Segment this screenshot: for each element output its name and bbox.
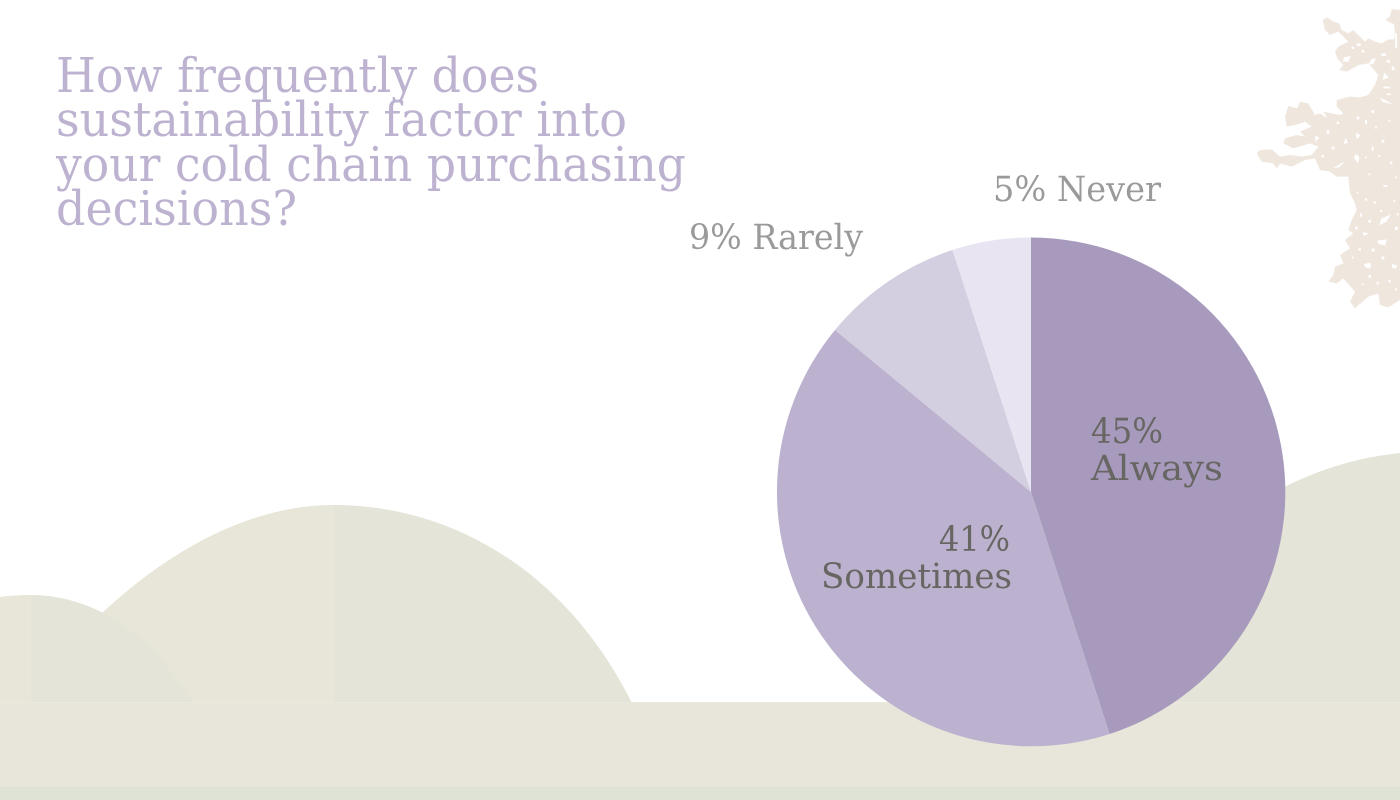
pie chart [777, 238, 1285, 746]
slice: Rarely 9% [835, 250, 1031, 492]
label: 45% Always: 45% [1091, 412, 1163, 452]
title [55, 48, 686, 237]
slice: Never 5% [952, 238, 1031, 492]
title: sustainability factor into [56, 92, 627, 148]
slice: Sometimes 41% [777, 330, 1110, 746]
hill: large centre-left [60, 505, 632, 703]
label: 41% Sometimes: Sometimes [821, 557, 1012, 597]
slice: Always 45% [1031, 238, 1285, 734]
label: 41% Sometimes: 41% [939, 520, 1010, 560]
label: 45% Always: Always [1090, 449, 1223, 489]
bottom green strip [0, 787, 1400, 800]
hill: small far left [0, 595, 193, 703]
hill: right [1100, 453, 1400, 703]
icon: tree silhouette top right [1257, 9, 1400, 308]
label: 5% Never: 5% Never [993, 170, 1161, 210]
label: 45% Always [1090, 412, 1223, 489]
title: How frequently does [56, 48, 539, 104]
title: your cold chain purchasing [55, 137, 686, 193]
label: 9% Rarely: 9% Rarely [689, 218, 863, 258]
title: decisions? [56, 181, 297, 237]
ground band [0, 702, 1400, 787]
label: 41% Sometimes [821, 520, 1012, 597]
